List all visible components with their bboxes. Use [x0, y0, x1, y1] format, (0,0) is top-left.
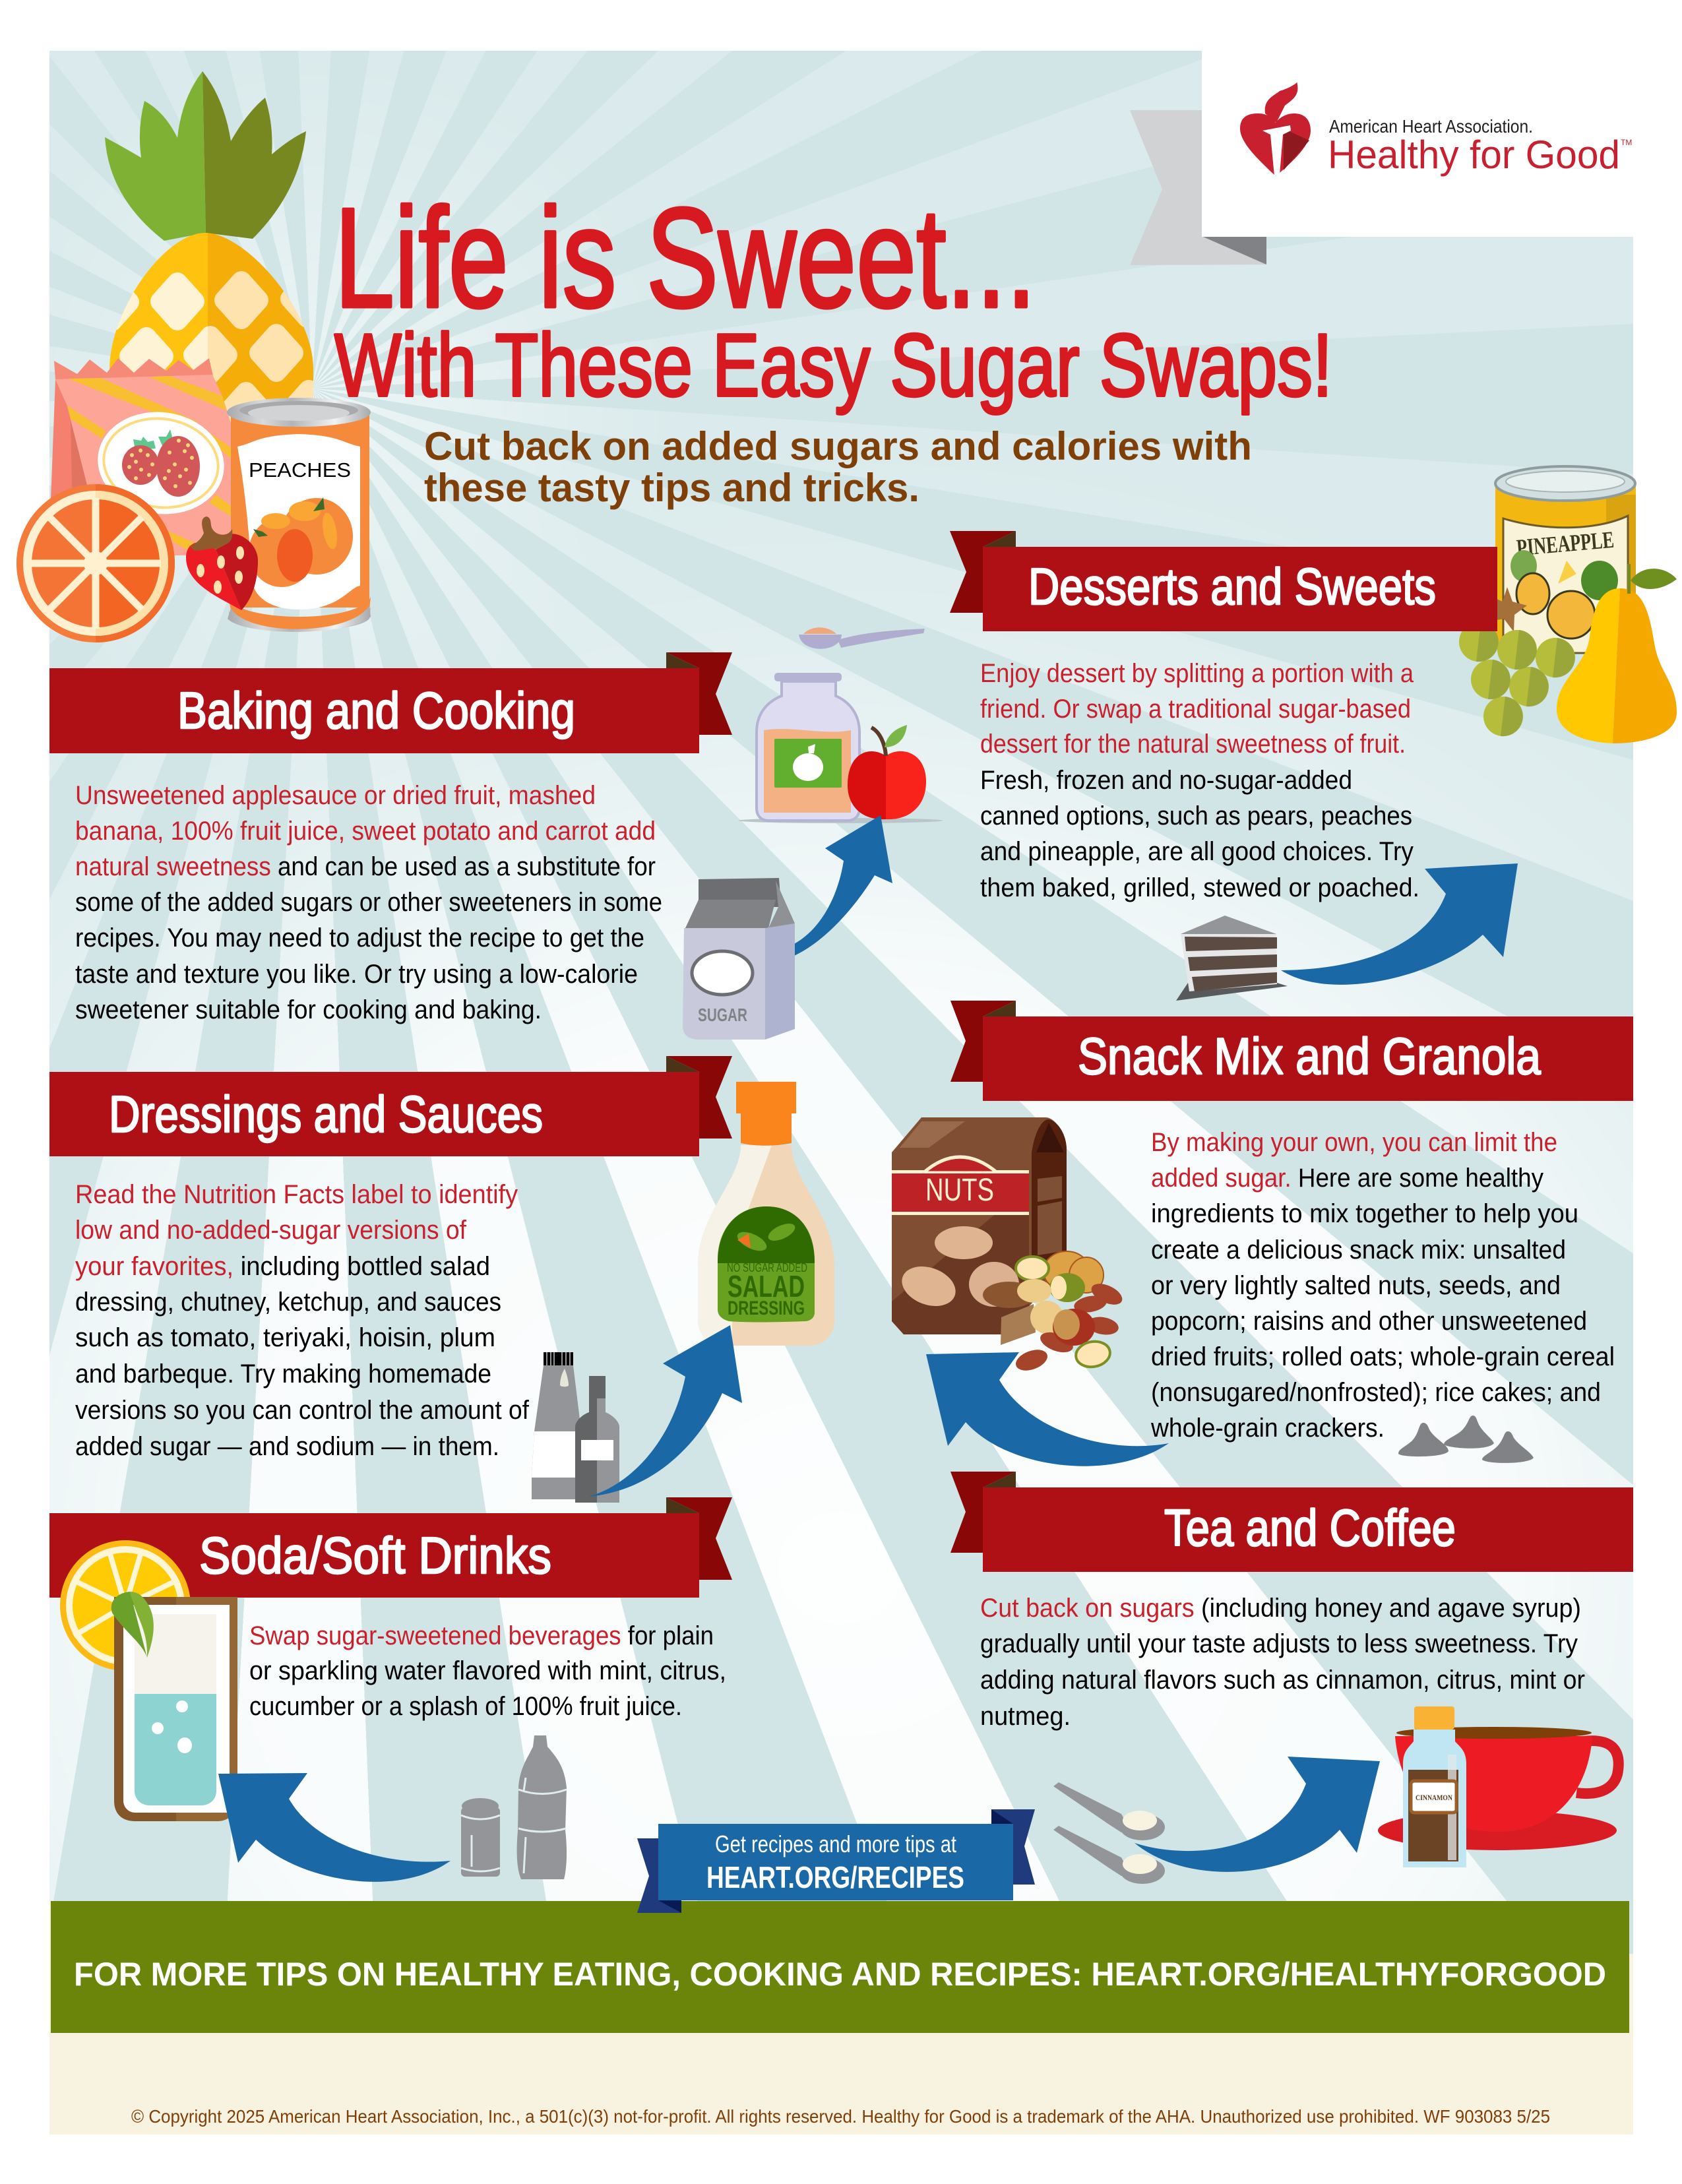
- title: [334, 178, 1332, 415]
- text: dressings and sauces: dressing, chutney, ketchup, and sauces: [75, 1288, 501, 1317]
- illustration: pile of nuts: [983, 1251, 1125, 1375]
- illustration: pineapple: [105, 71, 313, 423]
- illustration: pear: [1557, 564, 1677, 743]
- banner: snack mix and granola: Snack Mix and Granola: [1078, 1027, 1542, 1085]
- illustration: salad dressing bottle: SALAD: [728, 1269, 805, 1303]
- text: baking and cooking: recipes. You may need to adjust the recipe to get the: [75, 923, 644, 952]
- illustration: can of pineapple: [1489, 466, 1636, 653]
- ribbon: get recipes: [637, 1809, 1035, 1913]
- logo wordmark: TM: [1621, 138, 1632, 147]
- text: snack mix and granola: dried fruits; rolled oats; whole-grain cereal: [1151, 1342, 1615, 1371]
- title: Life is Sweet...: [334, 178, 1036, 337]
- can label text: PEACHES: [249, 458, 351, 482]
- logo wordmark: American Heart Association.: [1329, 116, 1533, 137]
- text: desserts and sweets: them baked, grilled, stewed or poached.: [980, 873, 1419, 902]
- arrow: sugar bag to jar: [794, 815, 892, 956]
- footer bar: green: [49, 1901, 1629, 2033]
- text: tea and coffee: Cut back on sugars (including honey and agave syrup): [980, 1594, 1581, 1623]
- arrow: soda to water: [218, 1773, 451, 1882]
- text: desserts and sweets: friend. Or swap a traditional sugar-based: [980, 695, 1411, 724]
- illustration: grey sauce bottles: [532, 1352, 619, 1503]
- illustration: can of peaches: [227, 398, 371, 632]
- banner: tea and coffee: Tea and Coffee: [1164, 1499, 1456, 1557]
- illustration: grey can and bottle: [461, 1735, 567, 1879]
- arrow: sauces to dressing: [588, 1325, 742, 1497]
- cinnamon label text: CINNAMON: [1416, 1793, 1452, 1802]
- text: baking and cooking: taste and texture you like. Or try using a low-calorie: [75, 960, 638, 989]
- illustration: apple: [848, 725, 926, 819]
- banner: soda and soft drinks: [49, 1497, 732, 1598]
- text: snack mix and granola: ingredients to mix together to help you: [1151, 1199, 1578, 1228]
- banner: desserts and sweets: Desserts and Sweets: [1028, 557, 1436, 615]
- text: baking and cooking: [75, 781, 662, 1024]
- text: snack mix and granola: By making your own, you can limit the: [1151, 1128, 1557, 1157]
- text: baking and cooking: natural sweetness and can be used as a substitute for: [75, 852, 656, 881]
- text: snack mix and granola: (nonsugared/nonfrosted); rice cakes; and: [1151, 1378, 1601, 1407]
- footer bar: copyright: [49, 1954, 1633, 2135]
- illustration: chocolate kisses: [1398, 1416, 1534, 1463]
- arrow: spoons to cinnamon: [1135, 1757, 1380, 1872]
- text: baking and cooking: banana, 100% fruit juice, sweet potato and carrot add: [75, 817, 656, 846]
- text: tea and coffee: adding natural flavors such as cinnamon, citrus, mint or: [980, 1666, 1585, 1695]
- banner: dressings and sauces: [49, 1056, 732, 1156]
- banner: baking and cooking: [49, 652, 732, 753]
- text: dressings and sauces: Read the Nutrition Facts label to identify: [75, 1180, 518, 1209]
- illustration: glass of water: [114, 1597, 237, 1821]
- illustration: spoons: [1053, 1782, 1165, 1884]
- illustration: slice of cake: [1176, 916, 1288, 1001]
- illustration: cinnamon jar: [1403, 1706, 1466, 1867]
- illustration: orange slice: [16, 484, 175, 642]
- illustration: jar of sugar: [738, 673, 943, 823]
- text: snack mix and granola: or very lightly salted nuts, seeds, and: [1151, 1271, 1561, 1300]
- logo: heart and torch: [1240, 82, 1311, 176]
- subtitle: [424, 424, 1252, 510]
- illustration: red cup and saucer: [1378, 1727, 1619, 1850]
- text: desserts and sweets: Enjoy dessert by splitting a portion with a: [980, 659, 1414, 688]
- text: snack mix and granola: [1150, 1128, 1615, 1443]
- title: With These Easy Sugar Swaps!: [334, 315, 1332, 415]
- illustration: salad dressing bottle: [698, 1082, 834, 1346]
- text: desserts and sweets: Fresh, frozen and no-sugar-added: [980, 766, 1352, 795]
- grey ribbon behind logo: [1130, 110, 1266, 265]
- text: tea and coffee: [980, 1594, 1585, 1731]
- text: dressings and sauces: low and no-added-sugar versions of: [75, 1216, 467, 1245]
- text: desserts and sweets: dessert for the natural sweetness of fruit.: [980, 730, 1406, 759]
- illustration: grapes: [1459, 622, 1575, 736]
- illustration: bag of nuts: [892, 1117, 1067, 1334]
- pineapple can label: PINEAPPLE: [1515, 526, 1615, 561]
- text: dressings and sauces: versions so you can control the amount of: [75, 1396, 530, 1425]
- ribbon: get recipes: Get recipes and more tips at: [715, 1830, 956, 1857]
- text: desserts and sweets: canned options, such as pears, peaches: [980, 801, 1412, 830]
- banner: snack mix and granola: [950, 1001, 1633, 1101]
- illustration: mint leaf: [111, 1592, 154, 1658]
- illustration: strawberry snack bag: [51, 358, 246, 555]
- salad dressing label text: NO SUGAR ADDED: [727, 1261, 807, 1274]
- text: soda and soft drinks: Swap sugar-sweetened beverages for plain: [249, 1621, 714, 1650]
- footer bar: copyright: © Copyright 2025 American Heart Association, Inc., a 501(c)(3) not-for-profit. All rights reserved. Healthy for Good is a trademark of the AHA. Unauthorized use prohibited. WF 903083 5/25: [131, 2106, 1550, 2127]
- nuts label: NUTS: [925, 1173, 994, 1208]
- text: dressings and sauces: such as tomato, teriyaki, hoisin, plum: [75, 1323, 495, 1352]
- text: soda and soft drinks: or sparkling water flavored with mint, citrus,: [249, 1656, 726, 1685]
- arrow: cake to fruit: [1281, 863, 1518, 985]
- banner: soda and soft drinks: Soda/Soft Drinks: [199, 1526, 551, 1584]
- subtitle: Cut back on added sugars and calories with: [424, 424, 1252, 468]
- illustration: salad dressing bottle: DRESSING: [728, 1297, 805, 1319]
- subtitle: these tasty tips and tricks.: [424, 466, 919, 510]
- text: baking and cooking: some of the added sugars or other sweeteners in some: [75, 888, 662, 917]
- text: dressings and sauces: [75, 1180, 530, 1461]
- text: snack mix and granola: whole-grain crackers.: [1150, 1414, 1385, 1443]
- text: soda and soft drinks: [249, 1621, 726, 1721]
- text: desserts and sweets: and pineapple, are all good choices. Try: [980, 837, 1414, 866]
- text: dressings and sauces: and barbeque. Try making homemade: [75, 1359, 491, 1388]
- text: snack mix and granola: added sugar. Here are some healthy: [1151, 1164, 1543, 1193]
- text: snack mix and granola: create a delicious snack mix: unsalted: [1151, 1235, 1566, 1264]
- banner: tea and coffee: [950, 1472, 1633, 1572]
- logo wordmark: Healthy for Good: [1328, 133, 1620, 177]
- logo panel: [1202, 40, 1637, 265]
- text: soda and soft drinks: cucumber or a splash of 100% fruit juice.: [249, 1692, 682, 1721]
- sugar label text: SUGAR: [698, 1005, 747, 1025]
- footer bar: green: FOR MORE TIPS ON HEALTHY EATING, COOKING AND RECIPES: HEART.ORG/HEALTHYFORGOOD: [74, 1956, 1606, 1993]
- illustration: strawberry: [186, 516, 258, 610]
- text: baking and cooking: sweetener suitable for cooking and baking.: [75, 995, 542, 1024]
- text: tea and coffee: gradually until your taste adjusts to less sweetness. Try: [980, 1629, 1578, 1658]
- banner: dressings and sauces: Dressings and Sauces: [109, 1085, 543, 1143]
- text: desserts and sweets: [980, 659, 1419, 902]
- banner: baking and cooking: Baking and Cooking: [177, 681, 575, 739]
- arrow: nuts mix: [926, 1352, 1169, 1466]
- banner: desserts and sweets: [950, 531, 1497, 631]
- text: baking and cooking: Unsweetened applesauce or dried fruit, mashed: [75, 781, 596, 810]
- ribbon: get recipes: HEART.ORG/RECIPES: [706, 1860, 964, 1894]
- text: snack mix and granola: popcorn; raisins and other unsweetened: [1151, 1307, 1587, 1336]
- text: tea and coffee: nutmeg.: [980, 1702, 1071, 1731]
- illustration: lemon slice: [60, 1540, 191, 1671]
- text: dressings and sauces: added sugar — and sodium — in them.: [75, 1432, 499, 1461]
- text: dressings and sauces: your favorites, including bottled salad: [75, 1252, 490, 1281]
- illustration: spoon of sugar: [799, 627, 925, 649]
- illustration: bag of sugar: [683, 878, 795, 1040]
